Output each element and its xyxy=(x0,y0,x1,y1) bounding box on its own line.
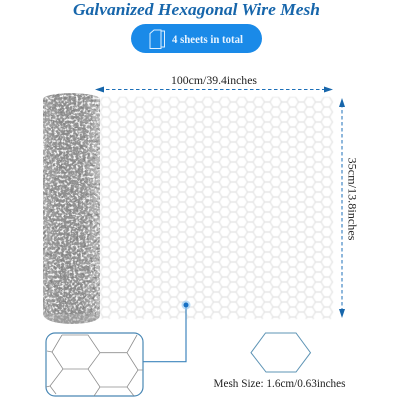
arrow: width dimension xyxy=(95,86,333,92)
icon: sheets xyxy=(150,30,164,48)
connector: mesh detail callout xyxy=(143,300,190,362)
width label: 100cm/39.4inches xyxy=(171,75,258,87)
mesh sheet xyxy=(98,97,333,319)
badge label: 4 sheets in total xyxy=(172,34,243,46)
arrow: height dimension xyxy=(339,98,345,318)
panel: mesh close-up xyxy=(46,333,143,396)
icon: hexagon mesh size xyxy=(251,333,310,372)
title: Galvanized Hexagonal Wire Mesh xyxy=(73,0,320,19)
height label: 35cm/13.8inches xyxy=(346,158,358,241)
mesh roll xyxy=(43,93,100,324)
mesh size label: Mesh Size: 1.6cm/0.63inches xyxy=(214,376,346,390)
badge: 4 sheets in total xyxy=(131,24,262,53)
